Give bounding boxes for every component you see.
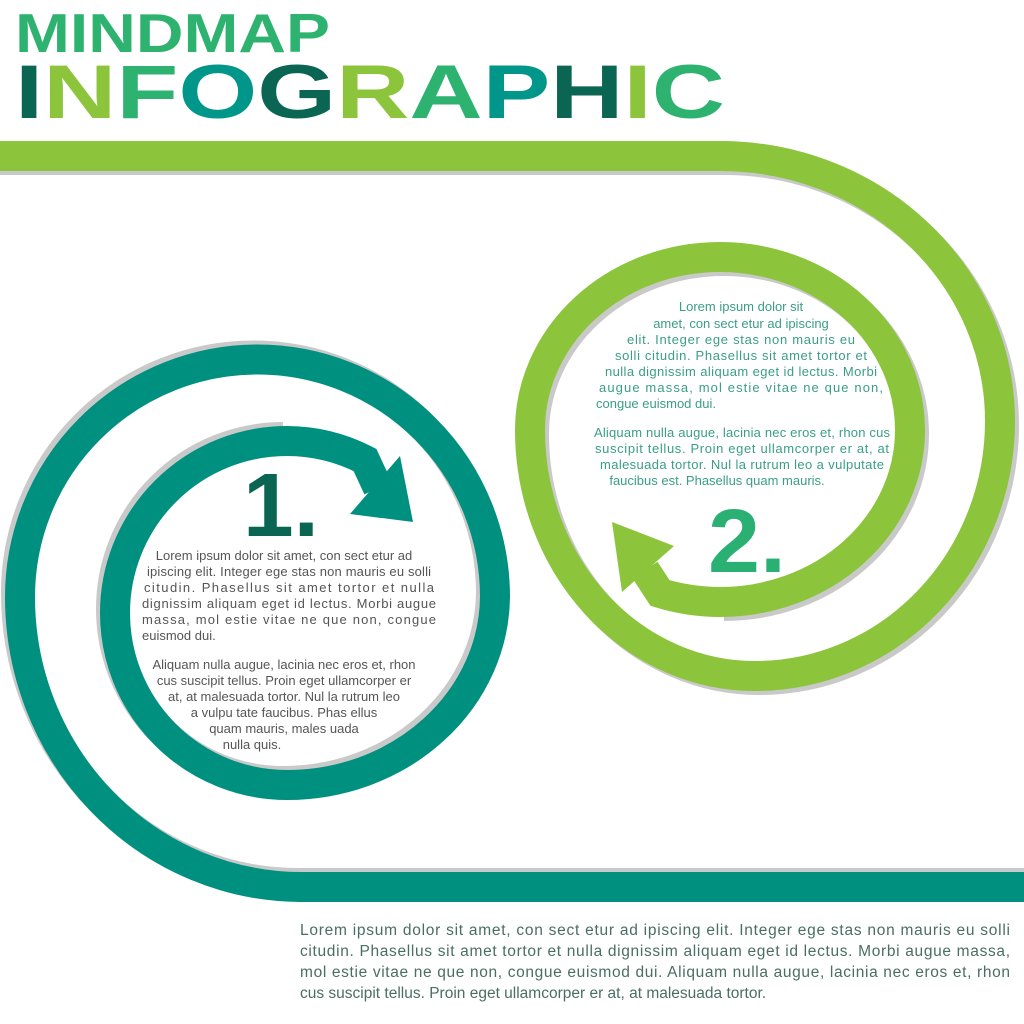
green spiral with arrow — [0, 156, 1004, 680]
bottom text block: Lorem ipsum dolor sit amet, con sect etur ad ipiscing elit. Integer ege stas non mauris eu solli — [300, 922, 1010, 939]
text block 1: cus suscipit tellus. Proin eget ullamcorper er — [157, 673, 412, 688]
text block 1: nulla quis. — [223, 737, 281, 752]
arrowhead 2 — [612, 522, 674, 592]
bottom text block: citudin. Phasellus sit amet tortor et nulla dignissim aliquam eget id lectus. Morbi augue massa, — [300, 943, 1010, 960]
text block 1: quam mauris, males uada — [209, 721, 360, 736]
text block 1: Lorem ipsum dolor sit amet, con sect etur ad — [156, 548, 412, 563]
title line 2: INFOGRAPHIC: INFO G RAPHIC — [15, 50, 725, 135]
text block 1: euismod dui. — [142, 628, 216, 643]
teal spiral with arrow — [16, 356, 1024, 887]
text block 1: Aliquam nulla augue, lacinia nec eros et, rhon — [152, 657, 416, 672]
number 1: 1. — [243, 456, 319, 556]
text block 2: augue massa, mol estie vitae ne que non, — [599, 380, 883, 395]
text block 2: elit. Integer ege stas non mauris eu — [627, 332, 855, 347]
title line 1: MINDMAP: MINDMAP — [15, 2, 330, 64]
text block 2: suscipit tellus. Proin eget ullamcorper er at, at — [595, 441, 889, 456]
text block 1: a vulpu tate faucibus. Phas ellus — [191, 705, 378, 720]
text block 1 — [142, 548, 436, 752]
title — [15, 2, 725, 135]
text block 2: Aliquam nulla augue, lacinia nec eros et, rhon cus — [594, 425, 890, 440]
number 2: 2. — [708, 492, 786, 592]
text block 2: malesuada tortor. Nul la rutrum leo a vulputate — [600, 457, 884, 472]
text block 2 — [594, 299, 890, 488]
bottom text block: cus suscipit tellus. Proin eget ullamcorper er at, at malesuada tortor. — [300, 985, 766, 1002]
bottom text block: mol estie vitae ne que non, congue euismod dui. Aliquam nulla augue, lacinia nec eros et, rhon — [300, 964, 1010, 981]
text block 1: ipiscing elit. Integer ege stas non mauris eu solli — [147, 564, 431, 579]
text block 2: congue euismod dui. — [596, 396, 716, 411]
text block 2: nulla dignissim aliquam eget id lectus. Morbi — [605, 364, 877, 379]
arrowhead 1 — [350, 456, 413, 522]
text block 2: solli citudin. Phasellus sit amet tortor et — [615, 348, 867, 363]
bottom text block — [300, 922, 1010, 1002]
text block 1: citudin. Phasellus sit amet tortor et nulla — [144, 580, 435, 595]
text block 1: massa, mol estie vitae ne que non, congue — [142, 612, 436, 627]
text block 1: dignissim aliquam eget id lectus. Morbi augue — [142, 596, 436, 611]
text block 1: at, at malesuada tortor. Nul la rutrum leo — [168, 689, 400, 704]
text block 2: Lorem ipsum dolor sit — [679, 299, 804, 314]
text block 2: amet, con sect etur ad ipiscing — [653, 316, 829, 331]
text block 2: faucibus est. Phasellus quam mauris. — [609, 473, 825, 488]
